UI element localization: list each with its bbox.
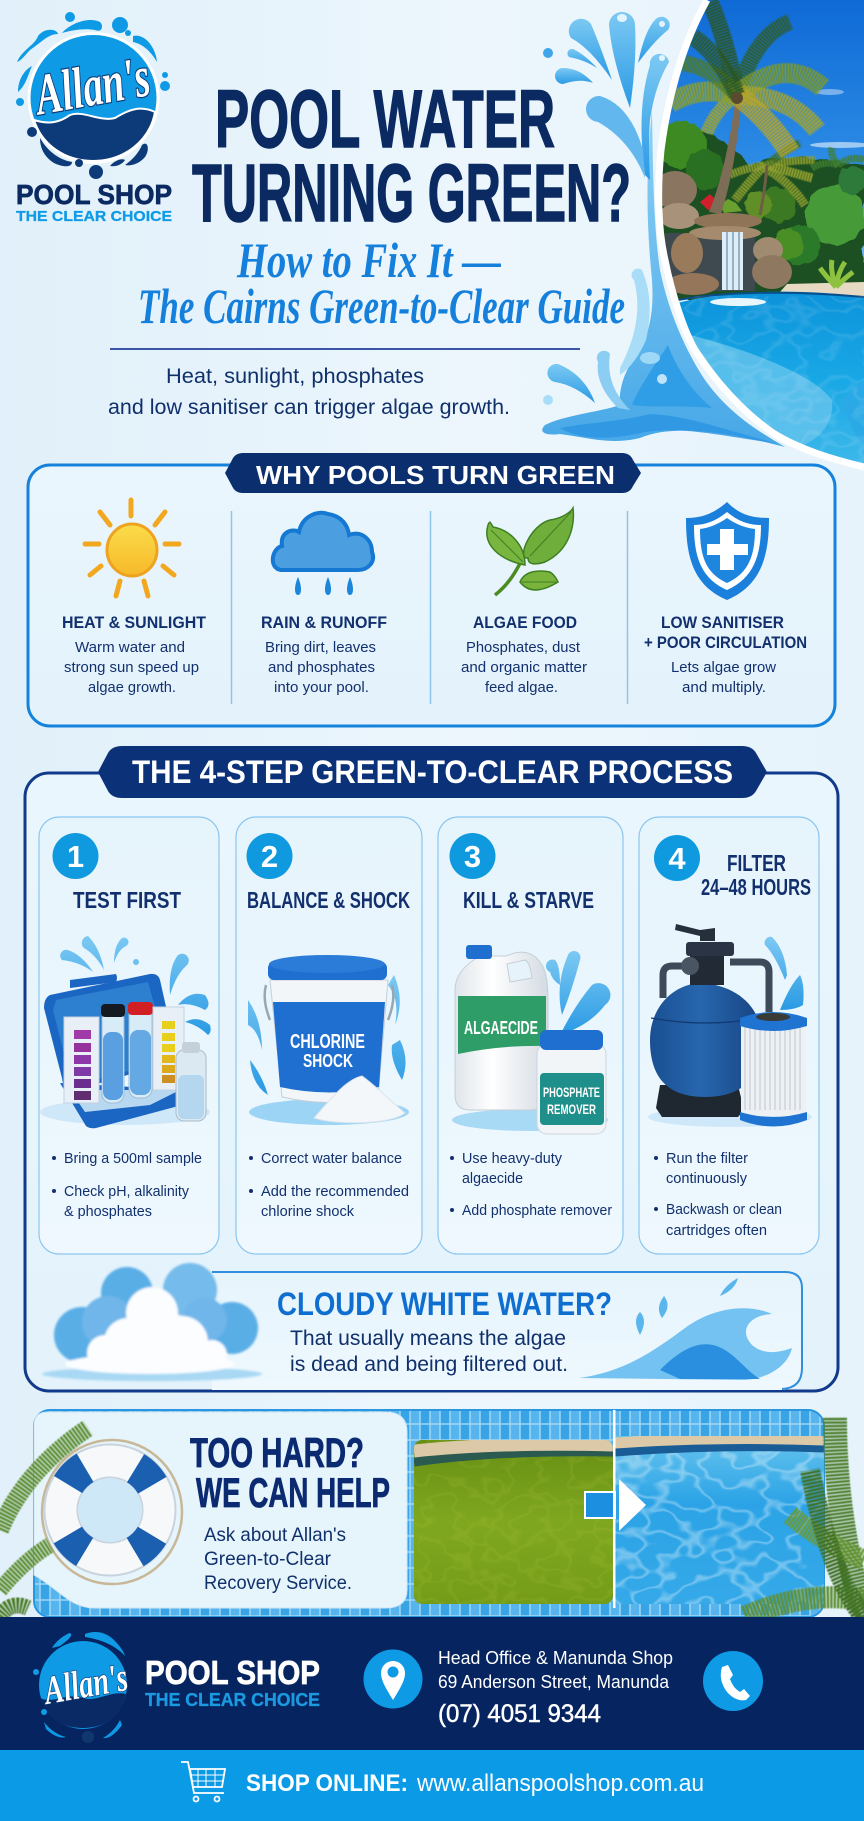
step 1 bullets [52, 1151, 202, 1220]
icon: wave [579, 1278, 792, 1380]
heading: too hard: TOO HARD? [190, 1429, 364, 1476]
contact details [438, 1647, 673, 1728]
cause: rain and runoff [261, 614, 387, 696]
step 2 bullets: chlorine shock [261, 1204, 355, 1220]
panel: too hard [34, 1412, 407, 1608]
step 1 number [52, 833, 98, 879]
icon: algaecide and phosphate remover: REMOVER [547, 1101, 596, 1117]
water splash [542, 0, 864, 467]
heading: why pools turn green [225, 453, 641, 493]
photo: green pool [414, 1440, 613, 1604]
heading: process [98, 746, 767, 798]
footer brand text [145, 1654, 320, 1710]
cause: algae food: feed algae. [485, 680, 558, 696]
subtitle: The Cairns Green-to-Clear Guide [138, 278, 625, 334]
cause: heat and sunlight [62, 614, 206, 696]
step 1 bullets: Bring a 500ml sample [64, 1151, 202, 1167]
heading: process: THE 4-STEP GREEN-TO-CLEAR PROCESS [132, 754, 733, 790]
logo: THE CLEAR CHOICE [16, 208, 172, 225]
step 4 bullets: Run the filter [666, 1151, 748, 1167]
text: recovery service: Recovery Service. [204, 1572, 352, 1594]
step 1 card: TEST FIRST [73, 887, 181, 913]
photo: clear pool [615, 1436, 824, 1604]
icon: rain cloud [273, 513, 373, 595]
callout text: That usually means the algae [290, 1327, 566, 1350]
cause: low sanitiser: LOW SANITISER [661, 614, 784, 632]
heading: too hard [190, 1429, 390, 1516]
step 2 card [236, 817, 422, 1254]
callout text: is dead and being filtered out. [290, 1353, 568, 1376]
step 3 bullets: algaecide [462, 1171, 523, 1187]
footer: shop online bar [0, 1750, 864, 1821]
step 4 bullets: Backwash or clean [666, 1202, 782, 1218]
title [192, 74, 631, 239]
cause: rain and runoff: RAIN & RUNOFF [261, 614, 387, 632]
cause: heat and sunlight: Warm water and [75, 640, 185, 656]
logo [16, 12, 172, 225]
cause: low sanitiser: + POOR CIRCULATION [644, 634, 807, 652]
panel: why pools turn green [28, 453, 835, 726]
callout text: CLOUDY WHITE WATER? [277, 1286, 612, 1322]
logo: Allan's [28, 43, 155, 128]
shop online text [246, 1770, 704, 1797]
cause: low sanitiser [644, 614, 807, 696]
icon: water test kit [40, 936, 211, 1128]
step 4 card [639, 817, 819, 1254]
subtitle: How to Fix It — [236, 232, 501, 288]
band: recovery service [0, 1410, 864, 1617]
icon: cart [181, 1762, 225, 1802]
footer brand text: POOL SHOP [145, 1654, 320, 1691]
icon: phone [703, 1651, 763, 1711]
footer brand text: THE CLEAR CHOICE [145, 1690, 320, 1710]
contact details: (07) 4051 9344 [438, 1700, 601, 1728]
icon: chlorine shock bucket: SHOCK [303, 1051, 353, 1071]
icon: algaecide and phosphate remover: ALGAECIDE [464, 1018, 538, 1038]
step 1 bullets: & phosphates [64, 1204, 152, 1220]
step 4 bullets [654, 1151, 782, 1239]
step 4 number [654, 835, 700, 881]
icon: algaecide and phosphate remover: PHOSPHATE [543, 1084, 600, 1100]
step 2 card: BALANCE & SHOCK [247, 887, 410, 913]
icon: location pin [364, 1650, 422, 1708]
cause: rain and runoff: Bring dirt, leaves [265, 640, 376, 656]
footer logo: Allan's [38, 1654, 131, 1713]
subtitle [138, 232, 625, 334]
cause: low sanitiser: and multiply. [682, 680, 766, 696]
step 3 bullets: Use heavy-duty [462, 1151, 563, 1167]
shop online text: www.allanspoolshop.com.au [416, 1770, 704, 1797]
step 1 bullets: Check pH, alkalinity [64, 1184, 190, 1200]
cause: rain and runoff: and phosphates [268, 660, 375, 676]
logo: POOL SHOP [16, 179, 172, 210]
step 4 bullets: cartridges often [666, 1223, 767, 1239]
step 2 bullets [249, 1151, 409, 1220]
heading: why pools turn green: WHY POOLS TURN GREEN [256, 460, 615, 490]
contact details: 69 Anderson Street, Manunda [438, 1672, 670, 1692]
cause: algae food: Phosphates, dust [466, 640, 580, 656]
shop online text: SHOP ONLINE: [246, 1770, 408, 1797]
cause: heat and sunlight: strong sun speed up [64, 660, 199, 676]
step 3 bullets [450, 1151, 612, 1219]
icon: cloud [42, 1263, 262, 1381]
step 4 bullets: continuously [666, 1171, 748, 1187]
intro text [108, 365, 510, 419]
cause: low sanitiser: Lets algae grow [671, 660, 777, 676]
step 1 number: 1 [67, 839, 84, 874]
step 4 number: 4 [668, 841, 686, 876]
text: recovery service: Ask about Allan's [204, 1524, 346, 1546]
cause: algae food: ALGAE FOOD [473, 614, 577, 632]
cause: heat and sunlight: algae growth. [88, 680, 176, 696]
text: recovery service: Green-to-Clear [204, 1548, 331, 1570]
icon: chlorine shock bucket [248, 955, 409, 1125]
step 2 number [246, 833, 292, 879]
intro text: and low sanitiser can trigger algae growth. [108, 396, 510, 419]
palm fronds: left [0, 1428, 88, 1617]
panel: four step process [25, 746, 838, 1391]
callout: cloudy white water [42, 1263, 802, 1390]
contact details: Head Office & Manunda Shop [438, 1647, 673, 1668]
footer logo [33, 1632, 131, 1743]
step 1 card [39, 817, 219, 1254]
heading: too hard: WE CAN HELP [196, 1469, 390, 1516]
hero photo: tropical pool [650, 0, 864, 470]
cause: algae food: and organic matter [461, 660, 587, 676]
icon: leaves [487, 508, 573, 595]
icon: lifebuoy [42, 1440, 182, 1584]
step 4 card: 24–48 HOURS [701, 874, 811, 900]
step 2 number: 2 [261, 839, 278, 874]
step 3 bullets: Add phosphate remover [462, 1203, 612, 1219]
step 3 card [438, 817, 623, 1254]
step 3 number: 3 [464, 839, 481, 874]
palm fronds: right [745, 1417, 864, 1617]
icon: sun [85, 500, 179, 596]
intro text: Heat, sunlight, phosphates [166, 365, 424, 388]
step 4 card: FILTER [727, 850, 786, 876]
footer: contact band [0, 1617, 864, 1750]
cause: heat and sunlight: HEAT & SUNLIGHT [62, 614, 206, 632]
callout text [277, 1286, 612, 1376]
step 2 bullets: Correct water balance [261, 1151, 402, 1167]
step 3 card: KILL & STARVE [463, 887, 594, 913]
arrow: before to after [585, 1410, 646, 1608]
cause: rain and runoff: into your pool. [274, 680, 369, 696]
text: recovery service [204, 1524, 352, 1594]
step 2 bullets: Add the recommended [261, 1184, 409, 1200]
icon: algaecide and phosphate remover [452, 945, 610, 1134]
step 3 number [450, 833, 496, 879]
title: POOL WATER [215, 74, 555, 165]
icon: chlorine shock bucket: CHLORINE [290, 1031, 365, 1053]
cause: algae food [461, 614, 587, 696]
icon: sand filter and cartridge [648, 924, 812, 1127]
icon: shield [686, 502, 769, 600]
